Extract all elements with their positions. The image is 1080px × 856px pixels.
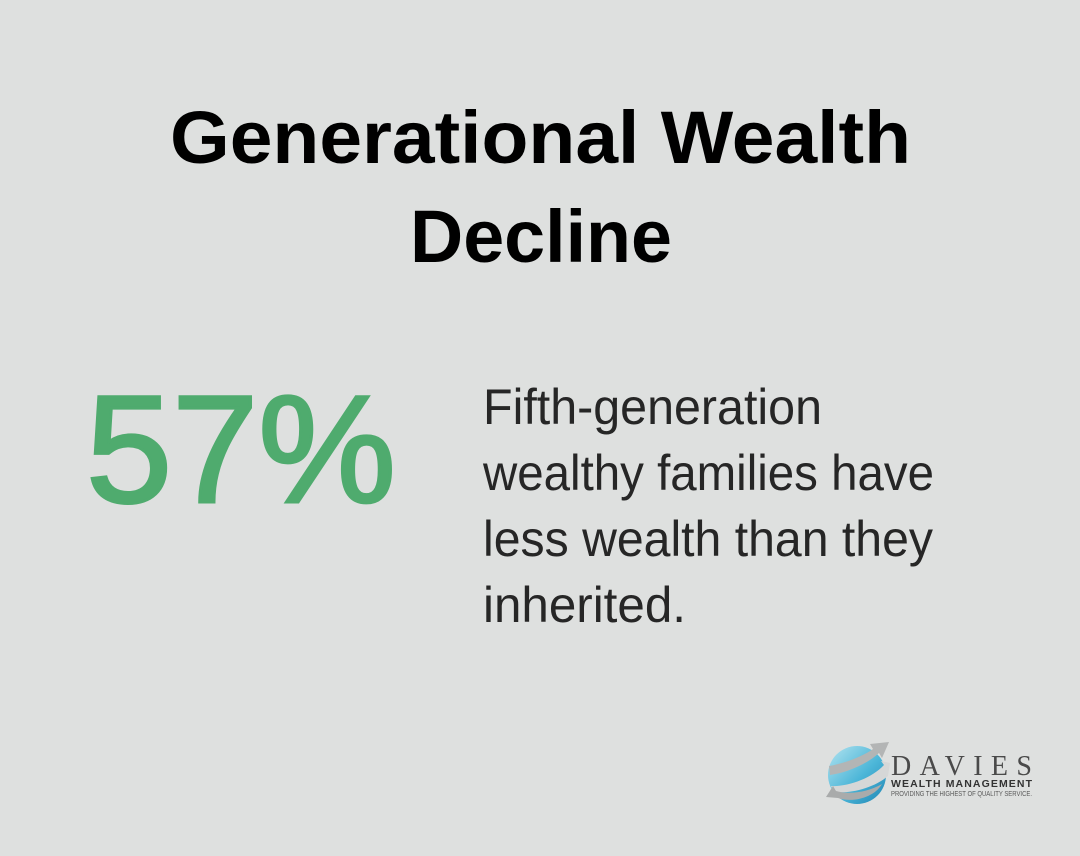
title: Decline — [410, 195, 672, 278]
tagline: PROVIDING THE HIGHEST OF QUALITY SERVICE. — [891, 791, 1032, 798]
wordmark subtitle: WEALTH MANAGEMENT — [891, 778, 1033, 790]
statistic: 57%: 57% — [86, 364, 396, 535]
title — [170, 96, 911, 278]
title: Generational Wealth — [170, 96, 911, 179]
description text: inherited. — [483, 577, 686, 633]
description text: less wealth than they — [483, 511, 933, 567]
description text: wealthy families have — [482, 445, 934, 501]
description text: Fifth-generation — [483, 379, 822, 435]
wordmark: DAVIES — [891, 751, 1032, 782]
description text — [482, 379, 934, 633]
icon: globe with arrows — [826, 742, 890, 804]
logo: Davies Wealth Management — [826, 742, 1033, 804]
